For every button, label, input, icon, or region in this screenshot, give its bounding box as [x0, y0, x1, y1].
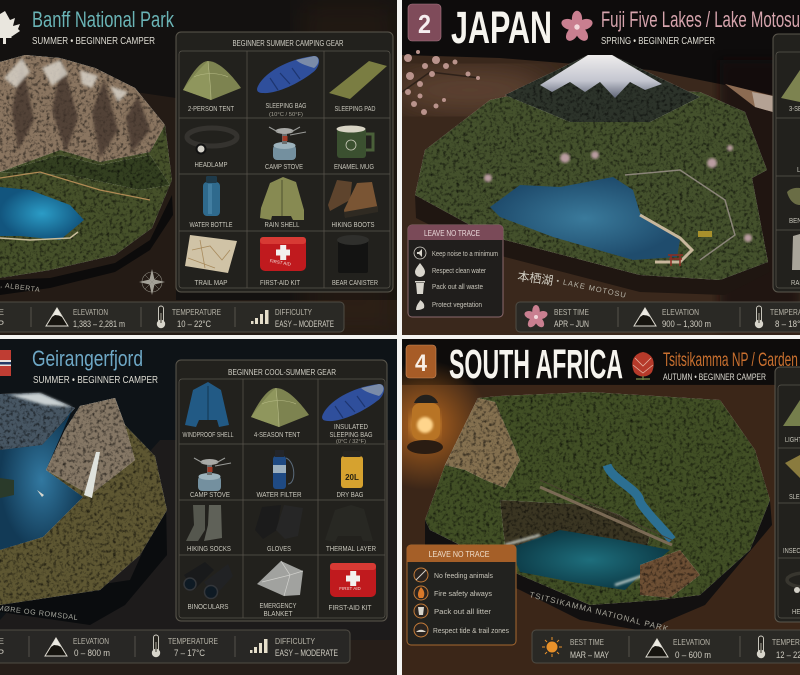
- gear item: binoculars: BINOCULARS: [188, 602, 229, 611]
- gear item: enamel mug: [334, 126, 374, 171]
- stat: temperature: [755, 306, 800, 329]
- stat: best time: [523, 305, 589, 329]
- gear item: bear canister: [332, 235, 378, 287]
- gear item: 2-person tent: 2-PERSON TENT: [188, 104, 234, 113]
- gear item: emergency blanket: EMERGENCY: [260, 601, 297, 610]
- gear item: sleeping pad: [329, 61, 387, 113]
- stat: temperature: [157, 306, 221, 329]
- gear item: enamel mug: ENAMEL MUG: [334, 162, 374, 171]
- gear item: sleeping pad: SLEEPING PAD: [334, 104, 376, 113]
- heading: Geirangerfjord: Geirangerfjord: [32, 346, 143, 371]
- gear item: first-aid kit: [328, 563, 376, 612]
- gear item: bear canister: BEAR CANISTER: [332, 278, 378, 287]
- gear item: first-aid kit: FIRST AID: [269, 258, 292, 267]
- gear item: rain shell: [260, 177, 304, 229]
- gear item: headlamp: [787, 573, 800, 616]
- terrain model: Tsitsikamma gorge: [425, 392, 772, 632]
- gear item: trail map: TRAIL MAP: [194, 278, 228, 287]
- gear item: windproof shell: [182, 382, 234, 439]
- gear item: 4-season tent: 4-SEASON TENT: [254, 430, 300, 439]
- heading: Banff National Park: SUMMER • BEGINNER CAMPER: [32, 35, 155, 47]
- note: waste: Pack out all waste: [432, 282, 483, 291]
- icon: number badge 2: 2: [418, 9, 431, 39]
- gear item: 4-season tent: [251, 388, 309, 439]
- callout: leave no trace, Japan: LEAVE NO TRACE: [424, 229, 480, 238]
- stat: difficulty: EASY – MODERATE: [275, 319, 334, 329]
- stat: best time: [0, 636, 4, 658]
- note: pack out litter: Pack out all litter: [434, 607, 491, 616]
- gear item: water bottle: WATER BOTTLE: [190, 220, 233, 229]
- stat: elevation: 0 – 800 m: [74, 648, 110, 658]
- heading: Banff National Park: [32, 11, 174, 44]
- gear item: trail map: [185, 235, 237, 287]
- gear item: rain shell: [791, 234, 800, 287]
- note: fire safety: Fire safety always: [434, 589, 492, 598]
- terrain model: Mount Fuji and Lake Motosu: [415, 55, 770, 295]
- gear item: first-aid kit: FIRST AID: [339, 586, 361, 591]
- decoration: blossom branch: [402, 50, 480, 115]
- stat: temperature: [757, 636, 800, 660]
- heading: Geirangerfjord: SUMMER • BEGINNER CAMPER: [33, 374, 158, 386]
- gear item: thermal layer: [325, 505, 376, 553]
- note: water: Respect clean water: [432, 266, 486, 275]
- panel: South Africa, Tsitsikamma: [360, 339, 800, 675]
- callout: leave no trace, South Africa: LEAVE NO TRACE: [428, 549, 490, 559]
- icon: number badge 2: [408, 4, 441, 41]
- stat: difficulty: DIFFICULTY: [275, 636, 315, 646]
- gear item: hiking socks: [186, 505, 231, 553]
- panel: beginner cool-summer gear: [176, 360, 387, 621]
- icon: number badge 4: 4: [415, 350, 428, 377]
- stat: best time: APR – JUN: [554, 319, 589, 329]
- map label: Lake Motosu: [518, 270, 626, 298]
- panel: beginner cool-summer gear: BEGINNER COOL-SUMMER GEAR: [228, 368, 336, 377]
- icon: Norwegian flag: [0, 350, 11, 376]
- gear item: sleeping bag: (10°C / 50°F): [269, 112, 303, 118]
- icon: lantern: [407, 395, 443, 454]
- icon: compass rose: [139, 269, 165, 295]
- heading: South Africa: SOUTH AFRICA: [449, 341, 623, 387]
- callout: leave no trace, Japan: [408, 225, 503, 317]
- heading: Geirangerfjord: [32, 346, 158, 386]
- gear item: emergency blanket: [257, 561, 303, 618]
- gear item: camp stove: CAMP STOVE: [190, 490, 230, 499]
- stat: elevation: ELEVATION: [662, 307, 699, 317]
- panel: Japan, Fuji Five Lakes: [390, 0, 800, 335]
- stat: elevation: 1,383 – 2,281 m: [73, 319, 125, 329]
- panel: Canada, Banff National Park: [0, 0, 397, 335]
- stat: elevation: [646, 637, 711, 660]
- map label: Lake Motosu: • LAKE MOTOSU: [556, 276, 628, 300]
- gear item: first-aid kit: FIRST-AID KIT: [328, 603, 372, 612]
- gear item: sleeping bag: SLEEPING BAG: [266, 101, 307, 110]
- stat: temperature: TEMPERATURE: [168, 636, 218, 646]
- stat: difficulty: [251, 309, 334, 327]
- gear item: insulated sleeping bag: INSULATED: [334, 422, 368, 431]
- stat: temperature: 7 – 17°C: [174, 648, 206, 658]
- terrain model: Banff mountains and lake: [0, 55, 173, 295]
- stats bar: South Africa: [532, 630, 800, 663]
- stat: best time: [0, 309, 4, 325]
- panel: Norway, Geirangerfjord: [0, 339, 397, 675]
- gear item: windproof shell: WINDPROOF SHELL: [182, 430, 234, 439]
- gear item: dry bag: [336, 451, 364, 499]
- gear item: lightweight tent: [783, 400, 800, 444]
- stats bar: Japan: [516, 302, 800, 332]
- stat: temperature: [152, 635, 218, 658]
- note: noise: Keep noise to a minimum: [432, 249, 498, 258]
- gear item: first-aid kit: FIRST-AID KIT: [260, 278, 300, 287]
- gear item: dry bag: DRY BAG: [336, 490, 364, 499]
- panel: beginner summer camping gear: BEGINNER SUMMER CAMPING GEAR: [232, 39, 344, 48]
- gear item: camp stove: [265, 127, 306, 171]
- gear item: dry bag: 20L: [345, 473, 359, 482]
- stats bar: Banff: [0, 302, 344, 332]
- gear item: gloves: GLOVES: [267, 544, 291, 553]
- stat: temperature: 10 – 22°C: [177, 319, 212, 329]
- gear item: sleeping bag: [257, 56, 319, 118]
- gear item: sleeping pad: [785, 455, 800, 501]
- stat: difficulty: DIFFICULTY: [275, 307, 312, 317]
- stat: difficulty: [250, 636, 338, 658]
- stats bar: Norway: [0, 630, 350, 663]
- stat: elevation: [45, 636, 110, 658]
- terrain model: Geirangerfjord: [0, 393, 167, 625]
- stat: elevation: ELEVATION: [73, 307, 108, 317]
- icon: maple leaf: [0, 11, 20, 44]
- panel: gear, South Africa (partially cropped): [775, 367, 800, 622]
- note: vegetation: Protect vegetation: [432, 300, 482, 309]
- stat: elevation: [46, 307, 125, 329]
- gear item: binoculars: [184, 562, 233, 611]
- callout: leave no trace, South Africa: [407, 545, 516, 645]
- stat: temperature: TEMPERATURE: [172, 307, 221, 317]
- icon: protea flower: [632, 352, 654, 380]
- note: tide and trail: Respect tide & trail zones: [433, 626, 509, 635]
- gear item: insulated sleeping bag: SLEEPING BAG: [330, 430, 373, 439]
- map label: Lake Motosu: 本栖湖: [517, 268, 554, 288]
- heading: Banff National Park: Banff National Park: [32, 7, 175, 32]
- gear item: hiking socks: HIKING SOCKS: [187, 544, 231, 553]
- panel: beginner summer camping gear: [176, 32, 393, 292]
- stat: best time: BEST TIME: [554, 307, 589, 317]
- gear item: headlamp: HEADLAMP: [194, 160, 228, 169]
- gear item: thermal layer: THERMAL LAYER: [326, 544, 376, 553]
- stat: elevation: 900 – 1,300 m: [662, 319, 711, 329]
- gear item: 2-person tent: [183, 61, 241, 113]
- map label: Tsitsikamma National Park: TSITSIKAMMA NATIONAL PARK: [529, 590, 670, 634]
- stat: elevation: ELEVATION: [73, 636, 109, 646]
- stat: elevation: [634, 307, 711, 329]
- gear item: water filter: WATER FILTER: [256, 490, 302, 499]
- icon: number badge 4: [406, 345, 436, 378]
- gear item: hiking boots: [328, 180, 378, 229]
- heading: Fuji Five Lakes: [601, 11, 799, 44]
- decoration: scroll: [725, 84, 773, 112]
- gear item: emergency blanket: BLANKET: [264, 609, 293, 618]
- stat: best time: MAR – MAY: [570, 650, 609, 660]
- icon: cherry blossom: [561, 10, 593, 41]
- gear item: gloves: [255, 505, 303, 553]
- stat: difficulty: EASY – MODERATE: [275, 648, 338, 658]
- gear item: tent: [781, 70, 800, 113]
- gear item: bento: [787, 188, 800, 225]
- gear item: rain shell: RAIN SHELL: [264, 220, 300, 229]
- heading: Japan: JAPAN: [451, 2, 552, 53]
- gear item: camp stove: [190, 458, 231, 499]
- stat: best time: BEST TIME: [570, 637, 604, 647]
- gear item: first-aid kit: [260, 237, 306, 287]
- heading: Fuji Five Lakes: SPRING • BEGINNER CAMPER: [601, 35, 715, 47]
- heading: Tsitsikamma: [663, 349, 800, 383]
- gear item: insulated sleeping bag: [322, 384, 384, 445]
- stat: elevation: 0 – 600 m: [675, 650, 711, 660]
- gear item: water bottle: [190, 176, 233, 229]
- gear item: camp stove: CAMP STOVE: [265, 162, 303, 171]
- note: no feeding animals: No feeding animals: [434, 571, 493, 580]
- gear item: insulated sleeping bag: (0°C / 32°F): [336, 439, 366, 445]
- panel: gear, Japan (partially cropped): [773, 34, 800, 292]
- gear item: headlamp: [187, 128, 237, 169]
- gear item: water filter: [256, 450, 302, 499]
- gear item: hiking boots: HIKING BOOTS: [332, 220, 375, 229]
- stat: best time: [542, 637, 609, 660]
- stat: elevation: ELEVATION: [673, 637, 710, 647]
